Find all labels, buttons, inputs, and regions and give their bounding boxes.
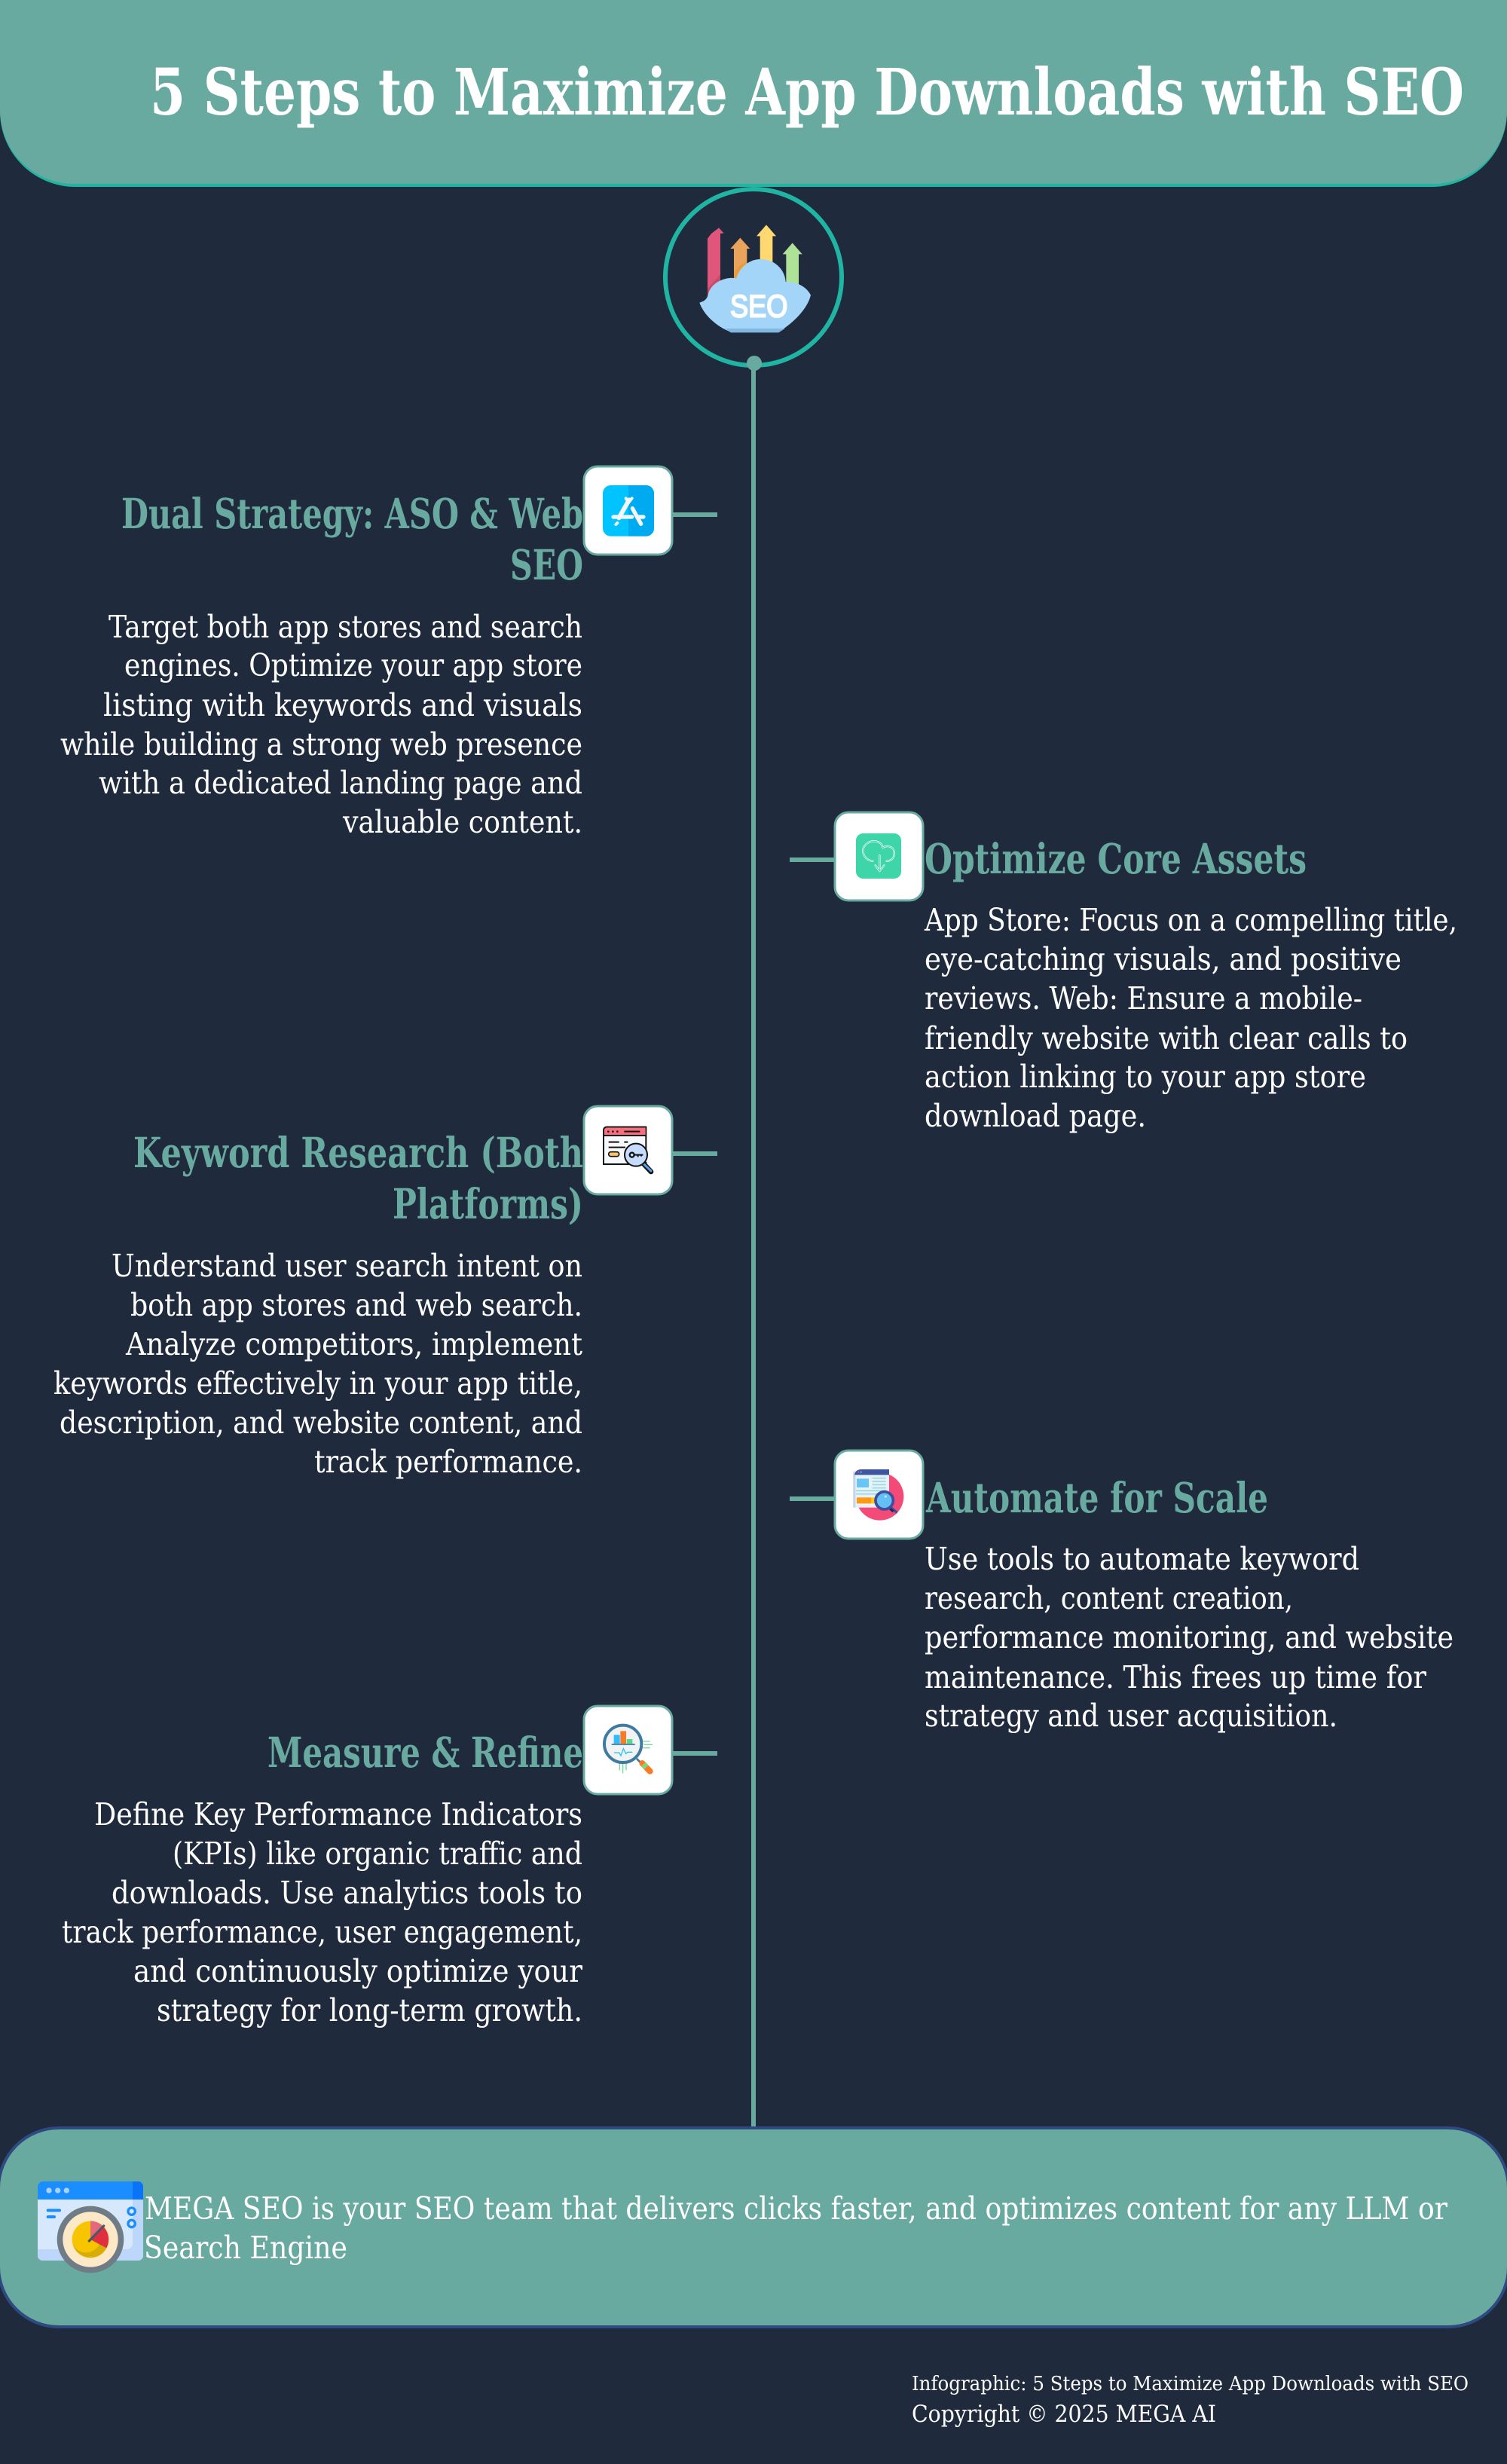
text: dual strategy body: while building a strong web presence: [60, 726, 582, 763]
icon: cloud download: [835, 812, 923, 900]
text: optimize body: eye-catching visuals, and positive: [925, 941, 1402, 977]
connector: [790, 858, 834, 862]
icon: analytics magnifier: [584, 1706, 672, 1794]
text: footer message: Search Engine: [144, 2230, 347, 2266]
text: keyword body: keywords effectively in your app title,: [53, 1365, 582, 1402]
text: optimize body: download page.: [925, 1098, 1146, 1134]
heading: keyword research: Platforms): [393, 1179, 583, 1228]
text: dual strategy body: listing with keywords and visuals: [103, 687, 582, 723]
text: dual strategy body: [60, 609, 582, 840]
text: credits: [912, 2373, 1469, 2428]
text: footer message: [144, 2190, 1447, 2266]
text: automate body: strategy and user acquisition.: [925, 1698, 1337, 1734]
text: dual strategy body: with a dedicated landing page and: [99, 765, 582, 801]
text: measure body: and continuously optimize your: [133, 1953, 582, 1989]
text: measure body: [62, 1796, 582, 2028]
text: credits: Infographic: 5 Steps to Maximize App Downloads with SEO: [912, 2373, 1469, 2395]
text: optimize body: friendly website with clear calls to: [925, 1020, 1408, 1056]
text: measure body: strategy for long-term growth.: [157, 1992, 582, 2028]
text: optimize body: [924, 902, 1457, 1134]
heading: optimize core assets: Optimize Core Assets: [925, 834, 1307, 883]
panel: step 2 optimize core assets: [790, 812, 1457, 1134]
text: measure body: (KPIs) like organic traffic and: [173, 1836, 582, 1872]
text: credits: Copyright © 2025 MEGA AI: [912, 2401, 1216, 2428]
text: automate body: [925, 1541, 1454, 1734]
connector: [673, 1751, 717, 1756]
header banner: [0, 0, 1507, 187]
timeline spine: [751, 363, 756, 2129]
text: automate body: performance monitoring, and website: [925, 1619, 1454, 1655]
panel: step 3 keyword research: [53, 1106, 717, 1480]
text: keyword body: Analyze competitors, implement: [125, 1326, 582, 1362]
text: keyword body: track performance.: [314, 1444, 582, 1480]
heading: dual strategy: [121, 489, 583, 589]
text: automate body: research, content creation,: [925, 1580, 1293, 1616]
text: keyword body: both app stores and web search.: [130, 1287, 582, 1323]
heading: measure and refine: Measure & Refine: [267, 1728, 583, 1777]
heading: dual strategy: SEO: [510, 540, 583, 589]
text: dual strategy body: valuable content.: [342, 804, 582, 840]
text: dual strategy body: engines. Optimize your app store: [124, 647, 582, 683]
icon: web page analysis: [835, 1451, 923, 1539]
text: keyword body: description, and website content, and: [60, 1405, 582, 1441]
icon: keyword search window: [584, 1106, 672, 1194]
text: dual strategy body: Target both app stores and search: [109, 609, 582, 645]
heading: keyword research: Keyword Research (Both: [133, 1128, 583, 1177]
heading: keyword research: [133, 1128, 583, 1228]
text: keyword body: Understand user search intent on: [112, 1248, 582, 1284]
text: optimize body: reviews. Web: Ensure a mobile-: [925, 980, 1362, 1016]
connector: [790, 1496, 834, 1501]
footer banner: [0, 2128, 1507, 2327]
icon: SEO cloud with arrows: SEO: [730, 289, 787, 323]
text: automate body: Use tools to automate keyword: [925, 1541, 1359, 1577]
icon: speed gauge window: [38, 2181, 143, 2273]
text: measure body: downloads. Use analytics tools to: [112, 1875, 582, 1911]
connector: [673, 512, 717, 517]
icon: app store: [584, 466, 672, 555]
text: keyword body: [53, 1248, 582, 1480]
panel: step 1 dual strategy: [60, 466, 717, 840]
icon: SEO cloud with arrows: [665, 189, 842, 371]
heading: automate for scale: Automate for Scale: [925, 1473, 1268, 1522]
text: measure body: track performance, user engagement,: [62, 1914, 582, 1950]
text: optimize body: action linking to your app store: [925, 1059, 1366, 1095]
panel: step 5 measure and refine: [62, 1706, 717, 2028]
text: measure body: Define Key Performance Indicators: [94, 1796, 582, 1833]
panel: step 4 automate for scale: [790, 1451, 1454, 1734]
heading: dual strategy: Dual Strategy: ASO & Web: [121, 489, 583, 538]
connector: [673, 1151, 717, 1156]
text: automate body: maintenance. This frees up time for: [925, 1659, 1426, 1695]
